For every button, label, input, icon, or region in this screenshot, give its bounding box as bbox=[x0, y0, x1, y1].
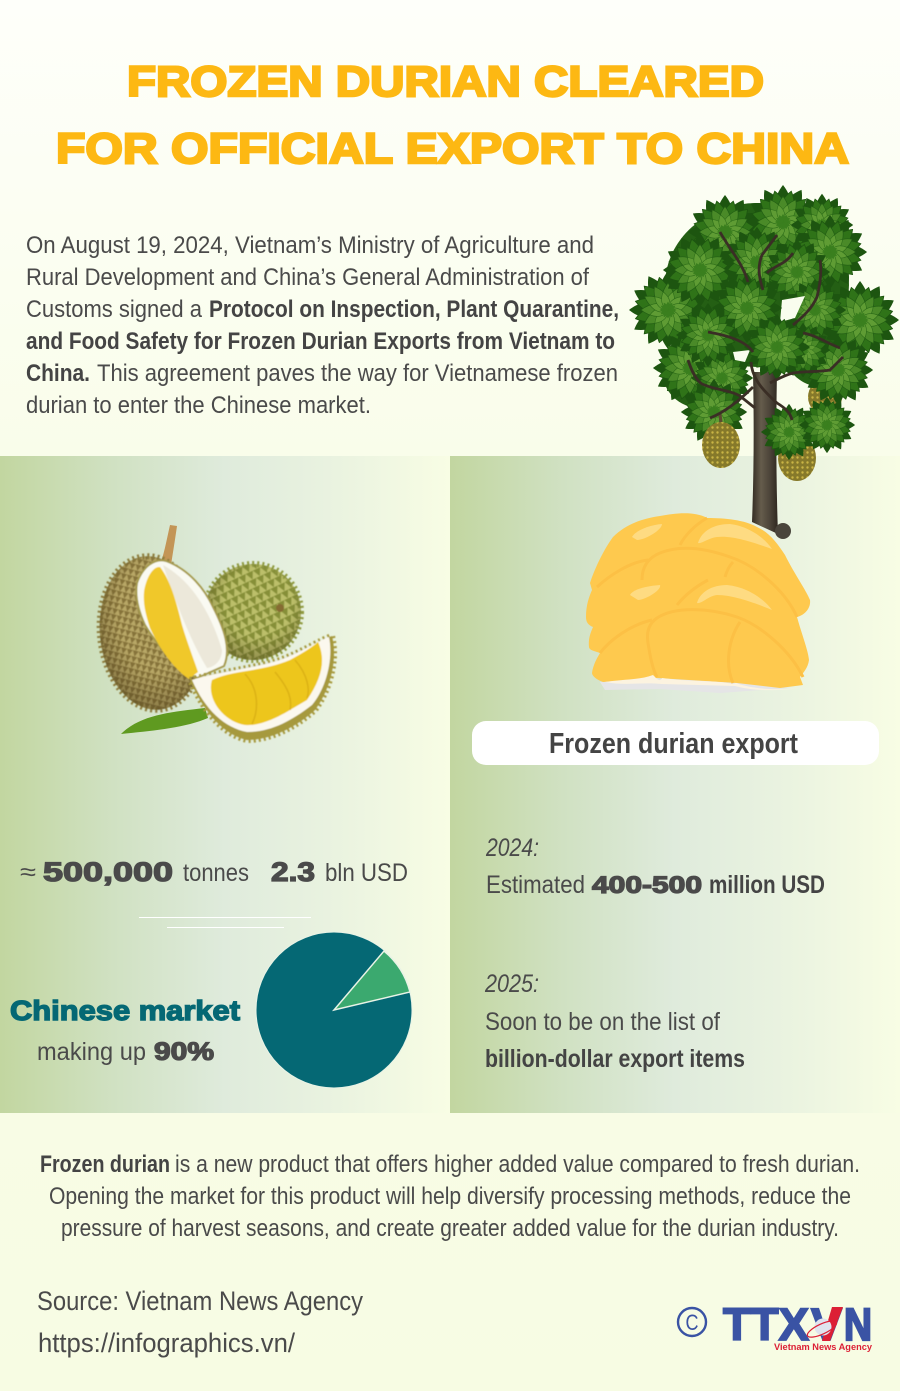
back durian bbox=[205, 564, 301, 660]
intro paragraph: and Food Safety for Frozen Durian Exports from Vietnam to bbox=[26, 328, 615, 355]
intro paragraph: Rural Development and China’s General Administration of bbox=[26, 264, 589, 291]
left panel background bbox=[0, 456, 450, 1113]
2025 outlook: Soon to be on the list of bbox=[485, 1008, 720, 1036]
canopy gaps bbox=[733, 296, 805, 362]
logo: TTXVN: TTX bbox=[723, 1299, 809, 1350]
2025 outlook bbox=[484, 970, 745, 1073]
leaf bbox=[121, 708, 208, 734]
pie chart: 90 percent share bbox=[256, 932, 412, 1088]
logo: TTXVN: N bbox=[844, 1299, 872, 1350]
left stats row: 500,000 bbox=[43, 857, 173, 887]
Chinese market label bbox=[10, 995, 240, 1066]
2024 estimate bbox=[485, 834, 825, 899]
intro paragraph: This agreement paves the way for Vietnamese frozen bbox=[97, 360, 618, 387]
title: FOR OFFICIAL EXPORT TO CHINA bbox=[56, 125, 849, 173]
open durian bbox=[92, 551, 227, 715]
Chinese market label: Chinese market bbox=[10, 995, 240, 1026]
source credit: Source: Vietnam News Agency bbox=[37, 1286, 363, 1316]
closing paragraph: Frozen durian bbox=[40, 1151, 170, 1178]
right panel background bbox=[450, 456, 900, 1113]
left stats row: bln USD bbox=[325, 859, 408, 887]
title: FROZEN DURIAN CLEARED bbox=[127, 58, 764, 106]
2024 estimate: million USD bbox=[709, 871, 825, 899]
left stats row: 2.3 bbox=[271, 857, 315, 887]
intro paragraph: On August 19, 2024, Vietnam’s Ministry of Agriculture and bbox=[26, 232, 594, 259]
illustration: durian tree bbox=[627, 183, 900, 539]
left stats row bbox=[20, 857, 408, 887]
stem bbox=[161, 525, 177, 565]
intro paragraph: durian to enter the Chinese market. bbox=[26, 392, 371, 419]
intro paragraph: Customs signed a bbox=[26, 296, 203, 323]
2025 outlook: 2025: bbox=[484, 970, 539, 998]
illustration: frozen durian flesh bbox=[586, 513, 810, 693]
closing paragraph bbox=[40, 1151, 860, 1242]
Chinese market label: making up bbox=[37, 1038, 146, 1066]
2024 estimate: 400-500 bbox=[592, 872, 702, 899]
durian slice bbox=[190, 636, 334, 740]
intro paragraph bbox=[26, 232, 619, 419]
logo: TTXVN: V bbox=[811, 1299, 842, 1350]
2024 estimate: Estimated bbox=[486, 871, 585, 899]
left stats row: tonnes bbox=[183, 859, 249, 887]
Chinese market label: 90% bbox=[154, 1038, 214, 1066]
copyright mark: C bbox=[686, 1310, 699, 1335]
title bbox=[56, 58, 849, 173]
decorative white lines bbox=[139, 917, 311, 918]
intro paragraph: China. bbox=[26, 360, 90, 387]
heading pill: frozen durian export: Frozen durian export bbox=[549, 728, 798, 760]
2025 outlook: billion-dollar export items bbox=[485, 1045, 745, 1073]
illustration: fresh durian fruits bbox=[92, 525, 334, 740]
left stats row: ≈ bbox=[20, 859, 36, 886]
heading pill: frozen durian export bbox=[472, 721, 879, 765]
2024 estimate: 2024: bbox=[485, 834, 539, 862]
source credit bbox=[37, 1286, 363, 1358]
branches bbox=[688, 232, 843, 420]
intro paragraph: Protocol on Inspection, Plant Quarantine, bbox=[209, 296, 619, 323]
logo: TTXVN bbox=[678, 1299, 872, 1352]
source credit: https://infographics.vn/ bbox=[38, 1328, 295, 1358]
copyright mark bbox=[678, 1308, 706, 1336]
logo: TTXVN: Vietnam News Agency bbox=[774, 1342, 872, 1352]
